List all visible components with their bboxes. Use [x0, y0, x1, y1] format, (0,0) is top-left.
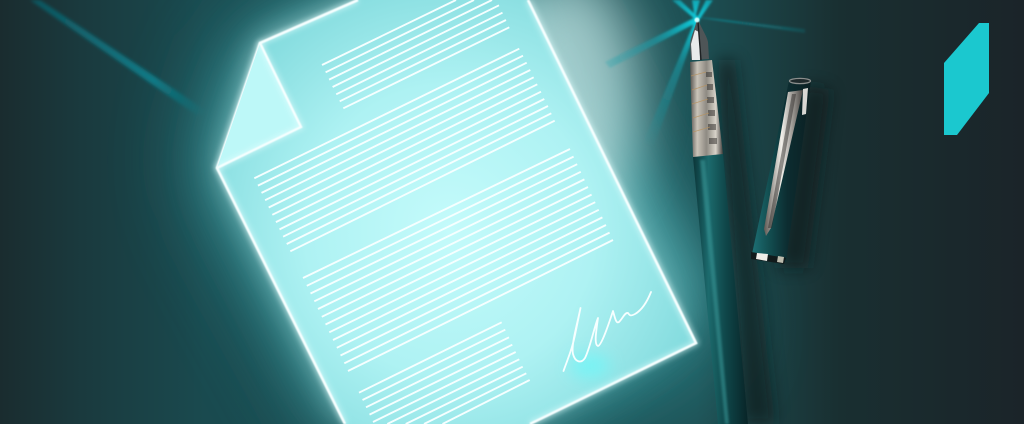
fountain pen: [690, 17, 775, 424]
folded corner: [217, 43, 301, 168]
pen cap: [751, 78, 830, 268]
signature: [564, 292, 651, 371]
cap shadow: [778, 85, 830, 268]
nib sparkle: [694, 18, 700, 22]
pen barrel: [693, 154, 748, 424]
pen nib: [690, 17, 709, 60]
brand logo mark: [944, 23, 989, 135]
wide teal glow behind the document: [205, 0, 720, 424]
document sheet: [217, 0, 696, 424]
signature glow: [570, 354, 610, 378]
cap top ring: [790, 78, 810, 84]
text lines: third block: [303, 149, 613, 371]
cap clip: [764, 88, 808, 236]
pen collar: [690, 60, 723, 157]
pen barrel highlight: [700, 160, 729, 424]
collar engraving: [706, 72, 717, 144]
sheet glowing outline: [217, 0, 358, 424]
text lines: top block: [322, 0, 509, 108]
cap bottom band: [751, 252, 786, 264]
tight pale glow behind the document: [222, 0, 680, 415]
pen nib light rays: [605, 0, 805, 126]
pen shadow: [718, 60, 775, 424]
light ray: upper left: [31, 0, 195, 110]
text lines: fourth block: [359, 322, 530, 424]
background: [28, 0, 827, 424]
pale glow upper right of the document: [500, 0, 640, 210]
sheet body: [217, 0, 696, 424]
medium glow behind the document: [217, 0, 700, 424]
text lines: second block: [254, 49, 555, 251]
cap body: [752, 81, 811, 262]
